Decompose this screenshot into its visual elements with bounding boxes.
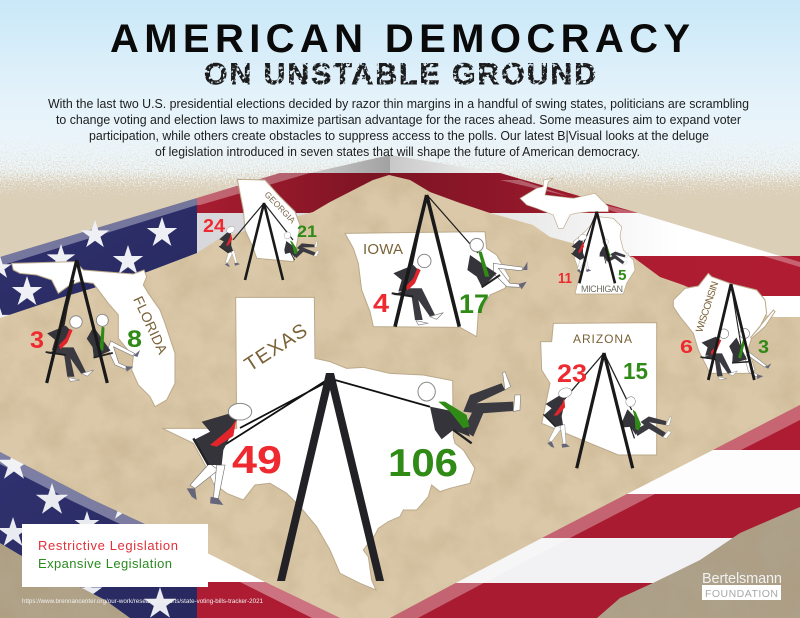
legend — [22, 524, 208, 587]
flag upper: pale stripe edge — [197, 173, 310, 205]
logo foundation text: FOUNDATION — [705, 588, 778, 600]
number: restrictive 23: 23 — [557, 360, 587, 388]
panel: Arizona — [535, 323, 678, 468]
sand: central ground — [0, 175, 800, 618]
figure: expansive swinger — [467, 238, 527, 289]
map: Arizona — [541, 323, 657, 455]
label: Georgia: GEORGIA — [263, 189, 298, 225]
swing frame — [277, 373, 384, 581]
legend: expansive: Expansive Legislation — [38, 556, 172, 571]
map: Iowa — [345, 232, 510, 337]
figure: expansive swinger — [593, 235, 632, 273]
flag: upper stripes and canton — [0, 155, 800, 336]
intro paragraph: participation, while others create obstacles to suppress access to the polls. Our latest B|Visual looks at the deluge — [89, 128, 709, 143]
map: Florida — [12, 262, 175, 407]
swing frame — [577, 353, 633, 468]
flag lower-left: blue canton — [0, 440, 197, 618]
label: Florida: FLORIDA — [130, 294, 171, 357]
subtitle: ON UNSTABLE GROUND — [204, 58, 596, 91]
figure: restrictive swinger — [700, 329, 738, 380]
flag upper: blue highlight — [0, 198, 197, 266]
swing ropes — [558, 353, 632, 410]
logo: Bertelsmann Foundation — [702, 571, 782, 600]
number: restrictive 4: 4 — [373, 288, 390, 318]
intro paragraph: of legislation introduced in seven states that will shape the future of American democracy. — [155, 144, 640, 159]
number: expansive 21: 21 — [297, 222, 317, 241]
flag upper: grey roof triangle — [310, 155, 390, 175]
number: expansive 17: 17 — [459, 289, 489, 319]
figure: restrictive swinger — [564, 233, 601, 276]
map: Wisconsin — [673, 273, 775, 373]
map: Texas — [162, 297, 475, 590]
swing ropes — [715, 284, 742, 350]
number: restrictive 24: 24 — [203, 216, 225, 236]
flag upper: pale right edge — [500, 180, 638, 213]
intro paragraph — [48, 96, 749, 159]
label: Arizona: ARIZONA — [573, 332, 632, 346]
figure: expansive swinger — [276, 227, 323, 268]
map: Michigan lower peninsula — [573, 217, 635, 294]
map: Georgia — [237, 179, 300, 262]
swing ropes — [580, 212, 608, 252]
figure: restrictive swinger — [46, 316, 94, 381]
legend: restrictive: Restrictive Legislation — [38, 538, 178, 553]
number: expansive 5: 5 — [618, 267, 626, 284]
label: Texas: TEXAS — [241, 320, 311, 376]
panel: Iowa — [345, 195, 527, 337]
label: Wisconsin: WISCONSIN — [694, 280, 721, 334]
flag lower-left: stars — [0, 448, 176, 618]
panel: Texas — [162, 297, 521, 590]
figure: restrictive swinger — [535, 387, 585, 452]
swing frame — [708, 284, 754, 380]
swing frame — [245, 203, 283, 280]
flag upper: blue canton — [0, 198, 197, 330]
number: restrictive 49: 49 — [232, 439, 282, 482]
swing frame — [395, 195, 459, 327]
flag lower-left: red stripe — [197, 582, 370, 618]
logo box — [702, 585, 781, 600]
label: Iowa: IOWA — [363, 241, 403, 258]
panel: Florida — [12, 260, 175, 407]
background: sky — [0, 0, 800, 215]
flag upper: white lower stripe — [197, 296, 800, 336]
source url: https://www.brennancenter.org/our-work/research-reports/state-voting-bills-tracker-2021 — [22, 598, 263, 605]
number: restrictive 11: 11 — [558, 270, 572, 287]
number: restrictive 6: 6 — [680, 337, 693, 357]
intro paragraph: With the last two U.S. presidential elections decided by razor thin margins in a handful of swing states, politicians are scrambling — [48, 96, 749, 111]
number: restrictive 3: 3 — [30, 327, 44, 354]
figure: restrictive swinger — [211, 225, 250, 270]
number: expansive 8: 8 — [127, 326, 142, 353]
figure: expansive swinger — [611, 390, 678, 454]
flag lower-right: stripes — [380, 405, 800, 618]
torn sand: bottom left — [0, 543, 130, 618]
panel: Wisconsin — [673, 273, 780, 381]
panel: Michigan — [520, 178, 635, 294]
flag edge: pale strip lower-left — [0, 452, 340, 618]
torn sand: bottom right — [597, 507, 800, 618]
swing ropes — [233, 203, 293, 240]
flag upper: stars — [0, 217, 177, 326]
flag edge: pale strip lower-right — [390, 405, 800, 618]
figure: expansive swinger — [81, 312, 147, 373]
label: Michigan: MICHIGAN — [581, 284, 623, 294]
title: AMERICAN DEMOCRACY — [110, 17, 690, 61]
swing frame — [579, 212, 615, 283]
figure: expansive swinger — [418, 372, 521, 443]
panel: Georgia — [203, 179, 323, 280]
flag lower-left: white stripe — [197, 530, 300, 582]
figure: expansive swinger — [722, 326, 780, 381]
number: expansive 106: 106 — [388, 442, 458, 485]
map: Michigan upper peninsula — [520, 178, 608, 228]
swing ropes — [407, 195, 478, 290]
swing frame — [47, 260, 107, 383]
logo wordmark: Bertelsmann — [702, 571, 782, 587]
flag upper: dark red stripe — [197, 173, 638, 213]
number: expansive 3: 3 — [758, 337, 769, 357]
background: blowing sand — [0, 125, 800, 335]
figure: restrictive swinger — [392, 254, 443, 325]
legend box — [22, 524, 208, 587]
flag upper: white stripe — [197, 213, 780, 256]
intro paragraph: to change voting and election laws to maximize partisan advantage for the races ahead. Some measures aim to expand voter — [56, 112, 742, 127]
swing ropes — [58, 260, 100, 350]
swing ropes — [222, 378, 430, 447]
flag: lower stripes and canton — [0, 405, 800, 618]
figure: restrictive swinger — [187, 403, 252, 505]
number: expansive 15: 15 — [623, 358, 648, 384]
